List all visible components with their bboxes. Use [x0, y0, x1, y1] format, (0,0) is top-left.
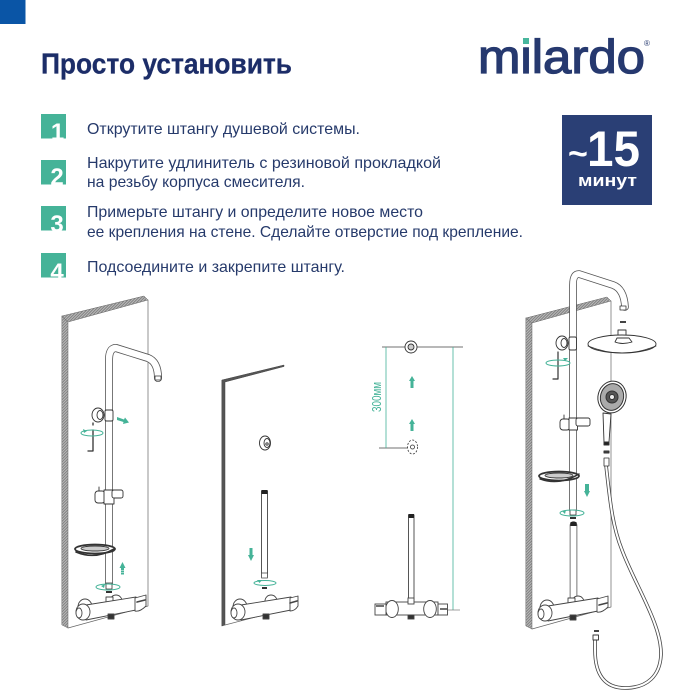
- step 3: 3: [50, 211, 64, 238]
- logo: milardo: ®: [644, 39, 650, 48]
- badge: about 15 minutes: 15: [587, 121, 640, 177]
- badge: about 15 minutes: [562, 115, 652, 205]
- step 3: Примерьте штангу и определите новое место: [87, 204, 423, 221]
- step 2: [41, 155, 441, 191]
- mixer: [231, 595, 298, 620]
- teal markers: [546, 358, 590, 516]
- badge: about 15 minutes: ~: [568, 135, 588, 173]
- step 1: 1: [51, 119, 64, 146]
- extension tube: [408, 514, 414, 600]
- joint and extension: [570, 510, 576, 526]
- step 3: ее крепления на стене. Сделайте отверстие под крепление.: [87, 224, 523, 241]
- step 4: [41, 253, 344, 278]
- slider: [95, 487, 123, 504]
- mixer: [538, 596, 608, 621]
- wall bracket: [405, 341, 417, 353]
- soap dish: [539, 472, 579, 482]
- hose: [593, 458, 661, 688]
- step 1: Открутите штангу душевой системы.: [87, 121, 360, 138]
- step 2: на резьбу корпуса смесителя.: [87, 174, 305, 191]
- step 1: [41, 114, 358, 138]
- title: Просто установить: [41, 48, 292, 80]
- step 4: 4: [50, 259, 64, 286]
- step 2: 2: [50, 164, 64, 191]
- step 4: Подсоедините и закрепите штангу.: [87, 259, 345, 276]
- illustration 2: extension: [222, 365, 298, 626]
- illustration 1: remove rail: [62, 296, 161, 628]
- soap dish: [75, 544, 115, 555]
- dimension: 300 mm: 300мм: [369, 382, 384, 412]
- slider: [560, 415, 590, 430]
- corner square: [0, 0, 26, 24]
- teal markers: [81, 430, 120, 590]
- extension tube: [262, 490, 268, 589]
- logo: milardo: milardo: [478, 30, 645, 83]
- step 3: [41, 204, 523, 241]
- badge: about 15 minutes: минут: [578, 171, 637, 190]
- rain shower head: [588, 330, 656, 353]
- teal markers: [248, 548, 276, 586]
- wall bracket: [92, 408, 113, 422]
- hand shower: [594, 378, 630, 453]
- illustration 3: measure: [369, 341, 463, 619]
- rail and arm: [573, 274, 625, 600]
- hex key: [553, 352, 558, 379]
- illustration 4: assembled shower: [526, 274, 661, 688]
- dashed position marker: [408, 440, 418, 454]
- teal up arrows: [409, 376, 415, 431]
- wall bracket: [556, 336, 576, 350]
- mixer: [76, 595, 146, 620]
- hex key: [88, 423, 93, 451]
- wall bracket: [260, 436, 270, 450]
- mixer front view: [375, 598, 448, 619]
- step 2: Накрутите удлинитель с резиновой прокладкой: [87, 155, 441, 172]
